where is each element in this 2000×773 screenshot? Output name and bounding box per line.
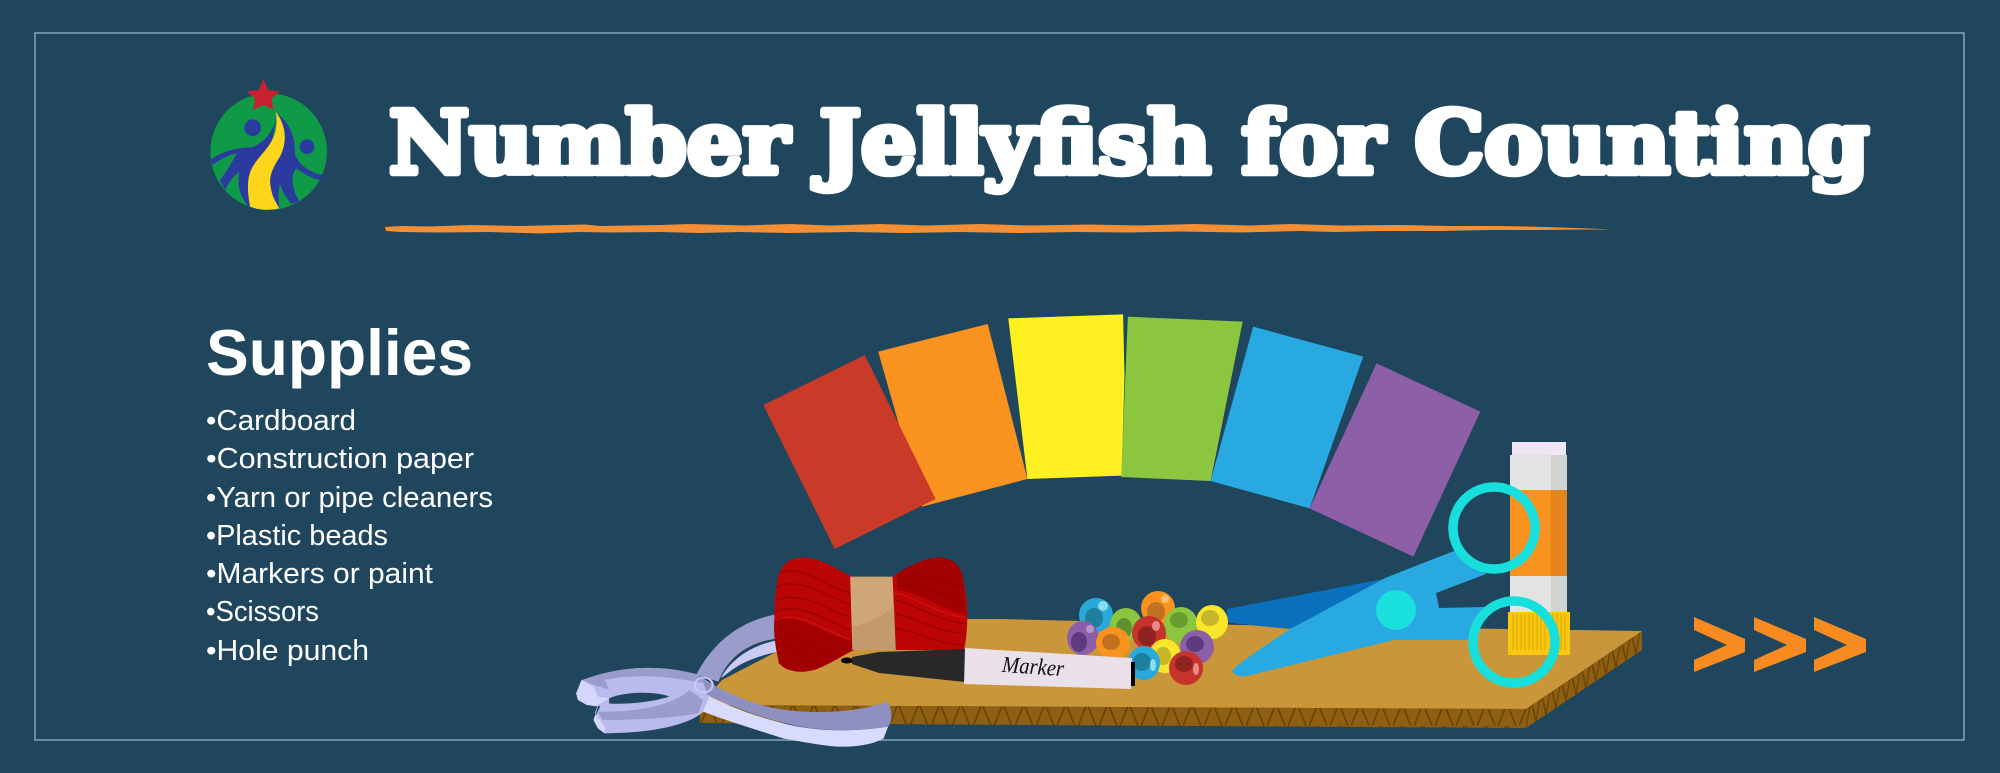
title: Number Jellyfish for Counting: [389, 93, 1869, 194]
construction paper arc: [763, 314, 1480, 557]
supplies list: •Markers or paint: [206, 558, 433, 590]
hole punch rivet: [695, 678, 713, 692]
marker: [841, 648, 1135, 689]
supplies list: •Scissors: [206, 596, 319, 628]
glue stick: [1508, 442, 1570, 655]
supplies heading: Supplies: [206, 316, 473, 389]
supplies list: •Hole punch: [206, 635, 369, 667]
supplies list: •Construction paper: [206, 443, 474, 475]
logo: [210, 79, 327, 210]
logo ribbon: [248, 112, 285, 210]
logo star: [247, 79, 280, 110]
logo figures: [211, 113, 323, 208]
cardboard: [700, 619, 1642, 728]
beads: [1067, 591, 1228, 685]
yarn band: [850, 577, 896, 650]
hole punch: [576, 614, 891, 747]
arrows: [1694, 617, 1866, 672]
supplies list: [206, 405, 493, 667]
scissors: [1227, 487, 1555, 683]
supplies list: •Plastic beads: [206, 520, 388, 552]
supplies list: •Yarn or pipe cleaners: [206, 482, 493, 514]
yarn: [774, 557, 967, 672]
supplies list: •Cardboard: [206, 405, 356, 437]
title underline: [385, 224, 1612, 234]
marker label: Marker: [1000, 652, 1066, 681]
